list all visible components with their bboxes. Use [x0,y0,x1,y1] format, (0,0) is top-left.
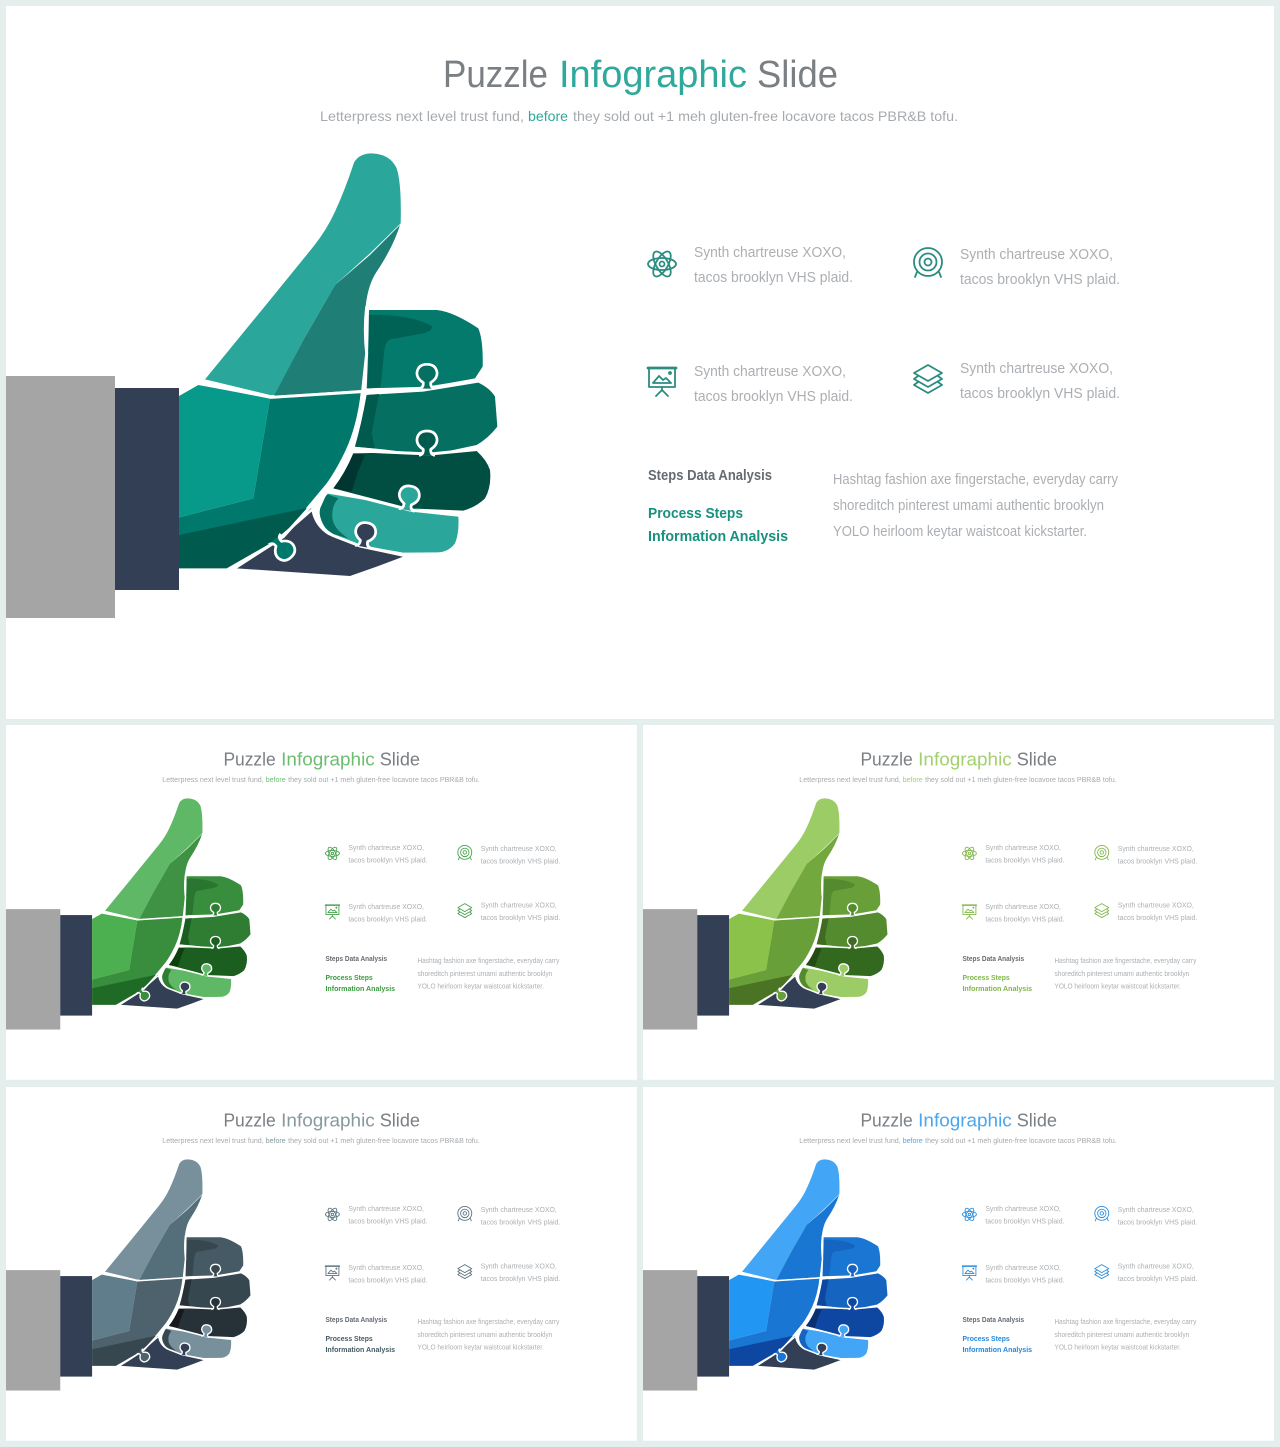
title [223,749,420,770]
text: feature four: tacos brooklyn VHS plaid. [1118,1274,1197,1283]
subtitle [799,1138,1117,1145]
thumbs-up puzzle hand [643,798,887,1030]
text: feature one [985,843,1064,864]
icon: target [914,248,942,277]
text: feature one: tacos brooklyn VHS plaid. [348,855,427,864]
title: Infographic [918,749,1012,770]
text: steps headings: Steps Data Analysis [648,468,772,484]
title: Puzzle [223,749,276,770]
title: Puzzle [223,1110,276,1131]
subtitle: Letterpress next level trust fund, [799,1138,901,1145]
thumbs-up puzzle hand [643,1159,887,1391]
text: feature two: Synth chartreuse XOXO, [1118,844,1194,853]
icon: presentation board [325,1266,339,1280]
text: feature three: tacos brooklyn VHS plaid. [985,1276,1064,1285]
text: description [418,956,560,991]
title: Puzzle [443,54,548,96]
icon: atom [962,1207,976,1222]
text: steps headings: Steps Data Analysis [962,1315,1024,1324]
text: feature four: Synth chartreuse XOXO, [481,901,557,910]
text: feature two: Synth chartreuse XOXO, [1118,1205,1194,1214]
text: feature one: Synth chartreuse XOXO, [985,843,1061,852]
text: description: YOLO heirloom keytar waistcoat kickstarter. [1055,1343,1181,1352]
subtitle: before [266,1138,286,1145]
text: feature one: tacos brooklyn VHS plaid. [348,1216,427,1225]
text: steps headings: Process Steps [962,1334,1010,1343]
icon: layers [458,904,472,918]
text: steps headings: Information Analysis [962,1345,1032,1354]
text: feature one: Synth chartreuse XOXO, [694,245,846,261]
title: Puzzle [860,749,913,770]
text: description: shoreditch pinterest umami authentic brooklyn [1055,969,1189,978]
panel: slate slide [6,1087,637,1441]
text: description: Hashtag fashion axe fingerstache, everyday carry [418,956,560,965]
text: description: YOLO heirloom keytar waistcoat kickstarter. [418,982,544,991]
text: steps headings: Information Analysis [962,984,1032,993]
text: feature four [1118,1262,1197,1283]
text: feature two: tacos brooklyn VHS plaid. [481,1217,560,1226]
text: feature four [1118,901,1197,922]
text: steps headings: Process Steps [962,973,1010,982]
text: feature three: tacos brooklyn VHS plaid. [694,389,853,405]
text: feature three: Synth chartreuse XOXO, [348,902,424,911]
title: Slide [757,54,838,96]
subtitle [162,1138,480,1145]
panel: green slide [6,725,637,1080]
subtitle: before [903,1138,923,1145]
thumbs-up puzzle hand [6,153,497,618]
title: Slide [1017,1110,1057,1131]
text: description: Hashtag fashion axe fingerstache, everyday carry [1055,956,1197,965]
subtitle: before [266,777,286,784]
text: feature three: tacos brooklyn VHS plaid. [348,915,427,924]
text: feature three: Synth chartreuse XOXO, [985,1263,1061,1272]
title: Slide [1017,749,1057,770]
icon: atom [325,846,339,861]
text: feature three [985,902,1064,924]
panel: blue slide [643,1087,1274,1441]
title: Slide [380,1110,420,1131]
title: Infographic [559,54,747,96]
text: feature one: tacos brooklyn VHS plaid. [985,855,1064,864]
text: feature one [985,1204,1064,1225]
text: feature four: Synth chartreuse XOXO, [960,361,1113,377]
subtitle: Letterpress next level trust fund, [320,108,524,124]
icon: layers [458,1265,472,1279]
text: feature one [694,245,853,286]
icon: layers [1095,1265,1109,1279]
subtitle: Letterpress next level trust fund, [799,777,901,784]
subtitle [162,777,480,784]
panel: main teal slide [6,6,1274,719]
text: steps headings [962,1315,1032,1354]
text: description: shoreditch pinterest umami authentic brooklyn [418,1330,552,1339]
text: feature one: Synth chartreuse XOXO, [348,1204,424,1213]
thumbs-up puzzle hand [6,798,250,1030]
text: feature three: Synth chartreuse XOXO, [985,902,1061,911]
text: steps headings [648,468,788,545]
text: feature two: Synth chartreuse XOXO, [481,844,557,853]
subtitle [799,777,1117,784]
title: Slide [380,749,420,770]
icon: atom [962,846,976,861]
text: steps headings [325,954,395,993]
text: description: shoreditch pinterest umami authentic brooklyn [418,969,552,978]
text: steps headings: Steps Data Analysis [325,1315,387,1324]
text: feature four: Synth chartreuse XOXO, [1118,1262,1194,1271]
text: description: Hashtag fashion axe fingerstache, everyday carry [1055,1317,1197,1326]
subtitle: before [903,777,923,784]
text: feature two: tacos brooklyn VHS plaid. [481,856,560,865]
text: description: YOLO heirloom keytar waistcoat kickstarter. [418,1343,544,1352]
text: feature two: tacos brooklyn VHS plaid. [1118,1217,1197,1226]
text: feature four [481,1262,560,1283]
subtitle: Letterpress next level trust fund, [162,777,264,784]
text: feature two: tacos brooklyn VHS plaid. [1118,856,1197,865]
text: feature one: tacos brooklyn VHS plaid. [694,270,853,286]
text: feature three [348,1263,427,1285]
text: feature two: Synth chartreuse XOXO, [481,1205,557,1214]
subtitle: they sold out +1 meh gluten-free locavore tacos PBR&B tofu. [573,108,958,124]
text: feature four: tacos brooklyn VHS plaid. [481,1274,560,1283]
text: steps headings: Process Steps [648,506,743,522]
text: feature one: tacos brooklyn VHS plaid. [985,1216,1064,1225]
text: steps headings: Process Steps [325,973,373,982]
title: Infographic [281,1110,375,1131]
text: description: Hashtag fashion axe fingerstache, everyday carry [833,472,1119,488]
text: feature four: Synth chartreuse XOXO, [481,1262,557,1271]
text: feature two: tacos brooklyn VHS plaid. [960,272,1120,288]
text: feature four: Synth chartreuse XOXO, [1118,901,1194,910]
subtitle: they sold out +1 meh gluten-free locavore tacos PBR&B tofu. [288,1138,480,1145]
title [223,1110,420,1131]
text: feature two [1118,1205,1197,1226]
text: description: shoreditch pinterest umami authentic brooklyn [833,498,1104,514]
text: feature two [481,1205,560,1226]
icon: presentation board [962,1266,976,1280]
text: feature three: tacos brooklyn VHS plaid. [348,1276,427,1285]
text: description [418,1317,560,1352]
text: feature one: Synth chartreuse XOXO, [348,843,424,852]
text: feature four: tacos brooklyn VHS plaid. [960,386,1120,402]
text: feature one [348,843,427,864]
text: description: YOLO heirloom keytar waistcoat kickstarter. [1055,982,1181,991]
text: steps headings: Information Analysis [648,529,788,545]
subtitle [320,108,958,124]
text: description: YOLO heirloom keytar waistcoat kickstarter. [833,524,1087,540]
icon: target [458,1206,472,1221]
text: feature three: Synth chartreuse XOXO, [348,1263,424,1272]
text: feature two [1118,844,1197,865]
text: description: Hashtag fashion axe fingerstache, everyday carry [418,1317,560,1326]
text: feature three: Synth chartreuse XOXO, [694,364,846,380]
title [860,749,1057,770]
title [860,1110,1057,1131]
text: steps headings: Information Analysis [325,1345,395,1354]
title: Infographic [281,749,375,770]
icon: atom [325,1207,339,1222]
text: feature three: tacos brooklyn VHS plaid. [985,915,1064,924]
text: feature three [694,364,853,405]
text: description [1055,956,1197,991]
icon: atom [648,249,676,279]
icon: target [1095,1206,1109,1221]
subtitle: before [528,108,568,124]
icon: presentation board [962,905,976,919]
subtitle: they sold out +1 meh gluten-free locavore tacos PBR&B tofu. [925,777,1117,784]
text: steps headings [325,1315,395,1354]
icon: presentation board [325,905,339,919]
text: feature two [481,844,560,865]
text: description [1055,1317,1197,1352]
title [443,54,838,96]
title: Puzzle [860,1110,913,1131]
icon: layers [1095,904,1109,918]
title: Infographic [918,1110,1012,1131]
text: steps headings [962,954,1032,993]
subtitle: Letterpress next level trust fund, [162,1138,264,1145]
icon: presentation board [648,368,676,396]
text: feature four: tacos brooklyn VHS plaid. [481,913,560,922]
text: feature four [960,361,1120,402]
icon: target [458,845,472,860]
text: steps headings: Information Analysis [325,984,395,993]
icon: target [1095,845,1109,860]
text: feature two: Synth chartreuse XOXO, [960,247,1113,263]
text: feature three [348,902,427,924]
subtitle: they sold out +1 meh gluten-free locavore tacos PBR&B tofu. [925,1138,1117,1145]
text: steps headings: Steps Data Analysis [962,954,1024,963]
thumbs-up puzzle hand [6,1159,250,1391]
text: description [833,472,1119,540]
text: feature one: Synth chartreuse XOXO, [985,1204,1061,1213]
text: feature one [348,1204,427,1225]
text: feature two [960,247,1120,288]
panel: lime slide [643,725,1274,1080]
text: feature four: tacos brooklyn VHS plaid. [1118,913,1197,922]
icon: layers [914,365,942,393]
subtitle: they sold out +1 meh gluten-free locavore tacos PBR&B tofu. [288,777,480,784]
text: feature four [481,901,560,922]
text: steps headings: Process Steps [325,1334,373,1343]
text: steps headings: Steps Data Analysis [325,954,387,963]
text: feature three [985,1263,1064,1285]
text: description: shoreditch pinterest umami authentic brooklyn [1055,1330,1189,1339]
